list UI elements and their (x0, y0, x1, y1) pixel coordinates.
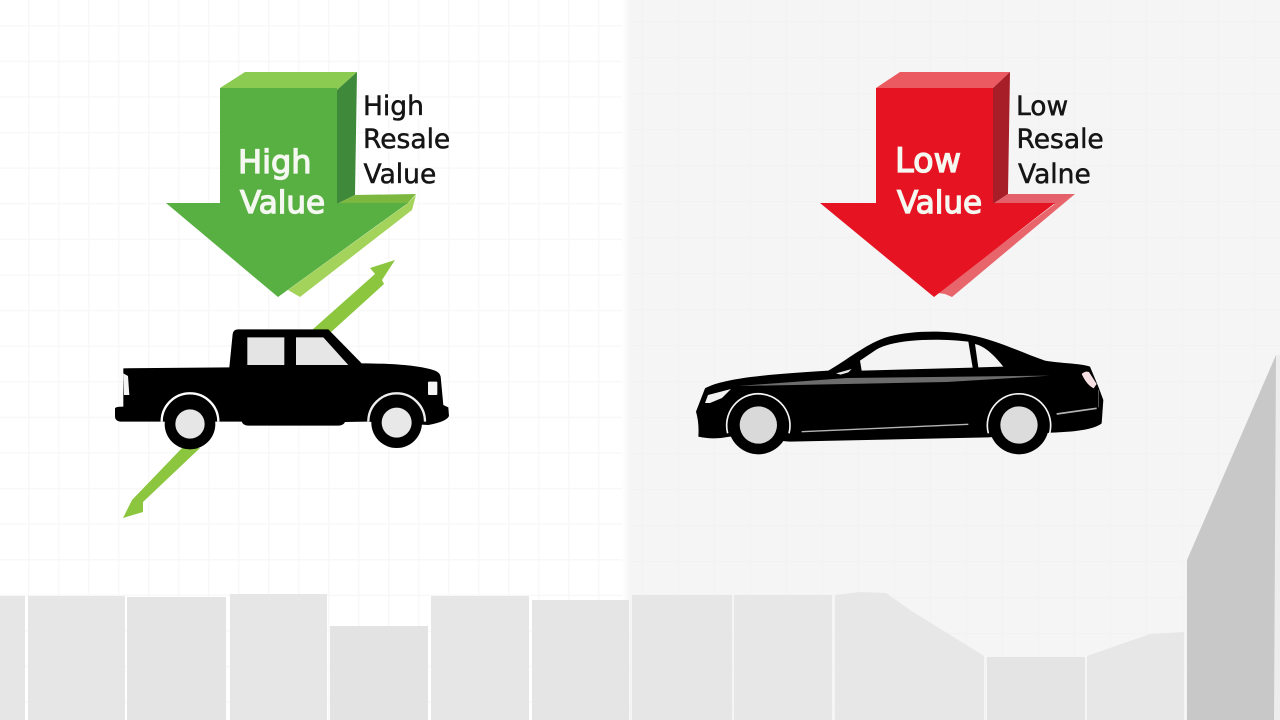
label: low resale value: Resale (1016, 124, 1104, 155)
label: high value (238, 143, 325, 221)
label: low resale value (1016, 91, 1104, 190)
label: high resale value: Value (364, 159, 436, 190)
label: low value (895, 141, 982, 221)
label: low value: Low (895, 141, 961, 180)
bar chart backdrop (0, 355, 1280, 720)
label: high resale value: Resale (363, 124, 450, 155)
label: high value: High (238, 143, 312, 181)
icon: sedan car (696, 332, 1103, 454)
panel: high value arrow (166, 72, 416, 297)
icon: pickup truck (115, 329, 449, 449)
label: low resale value: Valne (1018, 159, 1091, 190)
label: high resale value: High (363, 91, 424, 122)
icon: diagonal green growth arrow (123, 260, 395, 518)
label: low resale value: Low (1016, 91, 1068, 122)
label: low value: Value (897, 185, 982, 221)
label: high resale value (363, 91, 450, 190)
panel: low value arrow (820, 72, 1075, 297)
label: high value: Value (240, 185, 325, 221)
